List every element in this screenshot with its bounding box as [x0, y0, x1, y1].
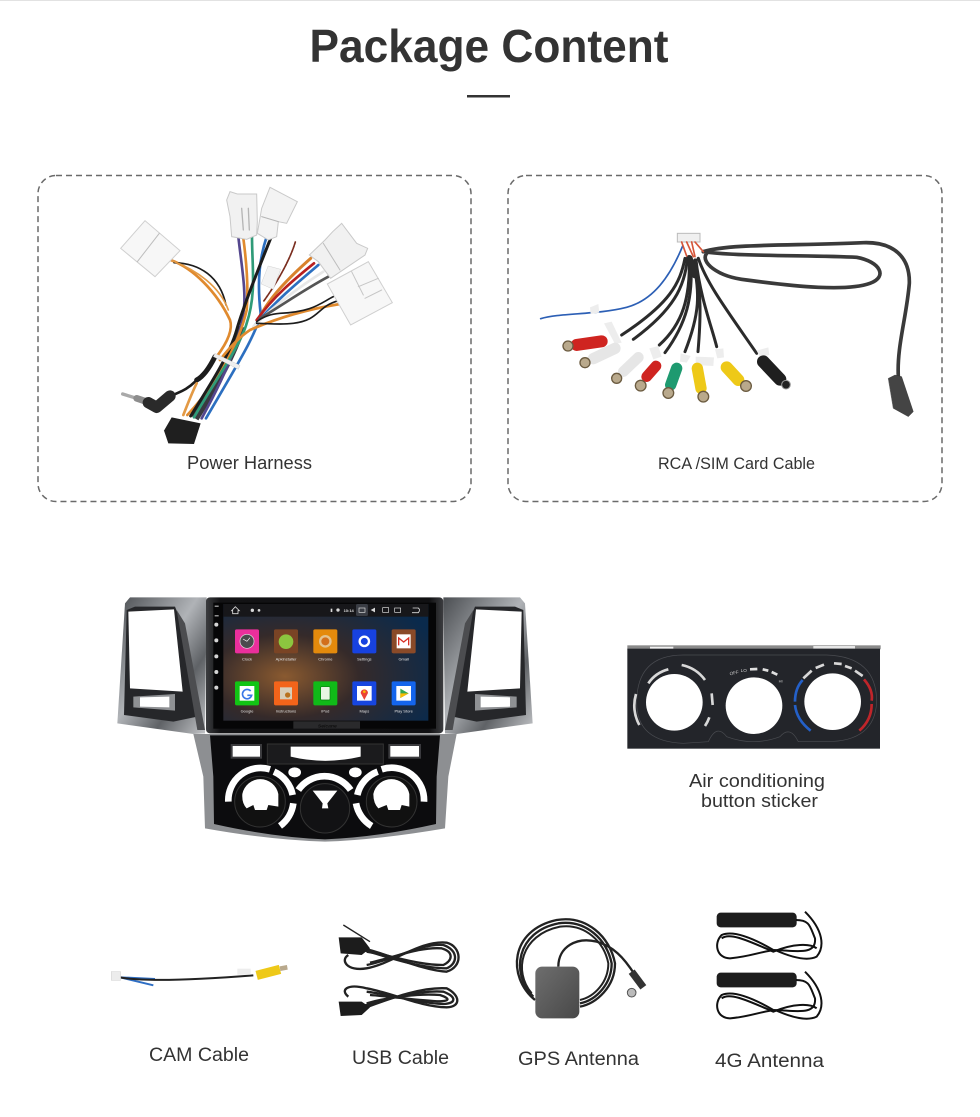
air vent slots [232, 745, 420, 758]
brand logo: Seicane [318, 723, 337, 729]
RCA plug: green [663, 368, 677, 398]
upper USB cable [339, 925, 459, 972]
label: GPS antenna: GPS Antenna [518, 1049, 639, 1070]
panel: RCA SIM card cable [508, 176, 942, 502]
app: Maps [352, 681, 376, 714]
label: Power Harness [187, 453, 312, 473]
brand logo [293, 721, 360, 729]
label: RCA /SIM Card Cable [658, 455, 815, 473]
air conditioning sticker [627, 645, 881, 749]
app: Clock: Clock [242, 657, 252, 662]
app: Google: Google [241, 709, 254, 714]
audio jack [763, 362, 790, 389]
panel: power harness [38, 176, 471, 502]
RCA plug: white 1 [580, 348, 615, 368]
app: Maps: Maps [359, 709, 369, 714]
RCA plug: yellow 1 [697, 368, 709, 402]
connector: top right [257, 187, 297, 240]
head unit with dash frame [117, 597, 533, 842]
label: USB cable: USB Cable [352, 1048, 449, 1069]
right dial [795, 663, 872, 731]
connector: left [121, 221, 180, 277]
app: iPod: iPod [321, 709, 329, 714]
RCA plug: red 2 [635, 366, 656, 391]
cable tie [213, 353, 240, 369]
hazard holes [288, 767, 301, 777]
illustration: power harness [121, 187, 392, 444]
connector [677, 233, 700, 242]
4G antennas [717, 912, 821, 1019]
centre dial: HI [779, 679, 783, 684]
antenna plug [123, 394, 170, 407]
connector: right lower [327, 262, 392, 325]
centre knob opening [298, 776, 351, 833]
label: 4G antenna: 4G Antenna [715, 1051, 824, 1072]
app: Instructions [274, 681, 298, 714]
USB cables [339, 925, 459, 1016]
app: Settings: Settings [357, 657, 372, 662]
antenna 1 [717, 912, 821, 959]
RCA plug: white 2 [612, 357, 638, 383]
RCA plug: red 1 [563, 341, 602, 351]
title underline [467, 95, 510, 98]
app: Instructions: Instructions [276, 709, 296, 714]
label: CAM cable: CAM Cable [149, 1045, 249, 1066]
camera cable [111, 967, 287, 985]
app: Play Store [392, 681, 416, 714]
app: ApkInstaller [274, 629, 298, 662]
SIM module [888, 375, 913, 417]
wire tags [590, 304, 769, 366]
status bar: 10:14 [344, 608, 355, 613]
side buttons [214, 606, 219, 690]
centre dial: LO [741, 668, 747, 673]
left knob opening [228, 768, 293, 827]
app: ApkInstaller: ApkInstaller [276, 657, 297, 662]
black breakout cables [622, 258, 757, 353]
app: Clock [235, 629, 259, 662]
lower USB cable [339, 987, 457, 1016]
long black loops [703, 243, 909, 377]
app: Gmail [392, 629, 416, 662]
app: Settings [352, 629, 376, 662]
label: air conditioning: Air conditioning [689, 771, 825, 791]
app: Google [235, 681, 259, 714]
status bar [232, 604, 419, 616]
app: Play Store: Play Store [394, 709, 414, 714]
ISO connector [164, 417, 201, 444]
coloured ribbon [682, 242, 703, 257]
right knob opening [356, 768, 424, 827]
display [223, 604, 428, 721]
app: Chrome [313, 629, 337, 662]
RCA plug: yellow 2 [727, 367, 751, 391]
right frame wing [443, 597, 533, 734]
label: button sticker: button sticker [701, 791, 818, 811]
left dial [634, 665, 713, 731]
lower fascia [193, 734, 457, 842]
app: Gmail: Gmail [398, 657, 409, 662]
centre dial: OFF [729, 669, 739, 676]
blue wire [541, 246, 683, 319]
wire label tag [261, 266, 281, 289]
illustration: RCA cable [541, 233, 913, 417]
title: Package Content [310, 20, 668, 72]
left frame wing [117, 597, 207, 734]
screen bezel [206, 597, 443, 733]
centre dial [726, 668, 783, 734]
wires [171, 237, 340, 418]
app: Chrome: Chrome [318, 657, 333, 662]
antenna 2 [717, 972, 821, 1019]
connector: right upper [309, 223, 368, 278]
app: iPod [313, 681, 337, 714]
connector: top centre [227, 192, 257, 239]
GPS antenna [517, 919, 643, 1018]
